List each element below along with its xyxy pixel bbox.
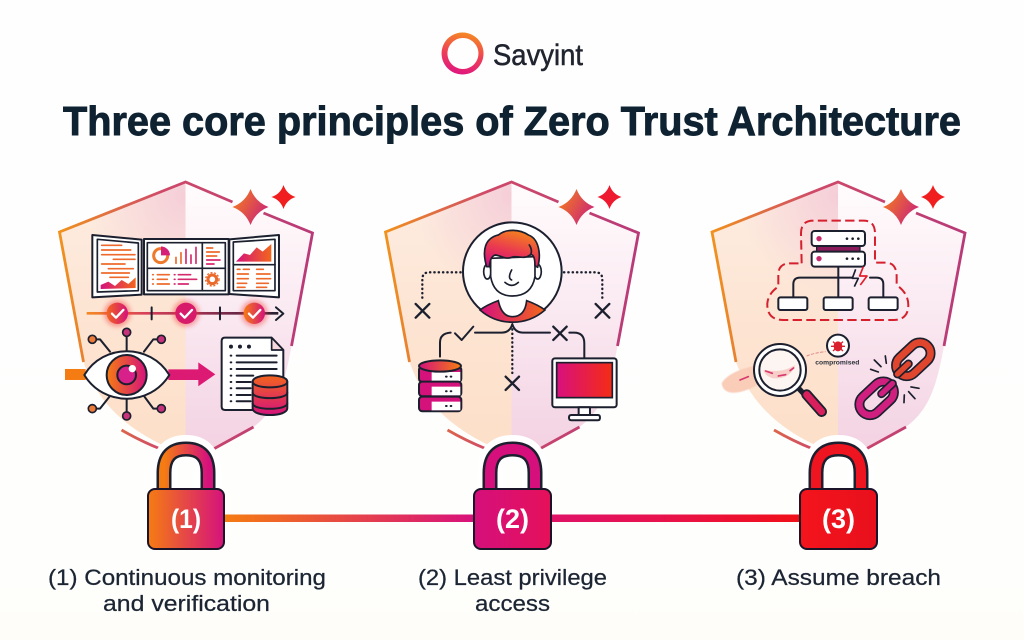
icon: user avatar: [463, 222, 562, 322]
lock 3 number: (3): [822, 504, 855, 534]
label 2: access: [475, 591, 550, 616]
label 1: and verification: [103, 591, 270, 616]
icon: three-panel dashboard: [92, 235, 279, 297]
compromised label: compromised: [815, 360, 860, 366]
icon: database: [419, 360, 461, 411]
lock 2 number: (2): [496, 504, 529, 534]
lock 1 number: (1): [171, 504, 201, 534]
icon: eye with data arrow: [65, 328, 215, 420]
connector line between locks: [222, 514, 802, 522]
lock 1: [148, 448, 224, 549]
logo: Savyint: [442, 32, 584, 74]
title: Three core principles of Zero Trust Architecture: [63, 98, 961, 144]
shield outline 3: [712, 182, 965, 455]
icon: compromised bug badge: [815, 335, 860, 366]
icon: document and database: [222, 338, 287, 415]
logo wordmark: Savyint: [493, 39, 584, 72]
shield outline 1: [60, 182, 312, 455]
panel: shield 3 assume breach: [712, 182, 965, 455]
icon: broken chain: [855, 338, 935, 420]
icon: verification timeline: [87, 300, 283, 327]
icon: access connections: [416, 272, 609, 390]
panel: shield 2 least privilege: [386, 182, 638, 455]
icon: logo ring: [442, 32, 484, 74]
icon: magnifying glass over trail: [722, 344, 826, 412]
label 2: [418, 565, 607, 616]
panel: shield 1 continuous monitoring: [60, 182, 312, 455]
label 1: [48, 565, 326, 616]
label 1: (1) Continuous monitoring: [48, 565, 326, 590]
lock 2: [474, 448, 551, 549]
lock 3: [800, 448, 877, 549]
icon: monitor: [552, 358, 617, 420]
icon: segmented network with servers: [767, 221, 908, 320]
label 2: (2) Least privilege: [418, 565, 607, 590]
shield outline 2: [386, 182, 638, 455]
label 3: (3) Assume breach: [736, 565, 941, 590]
